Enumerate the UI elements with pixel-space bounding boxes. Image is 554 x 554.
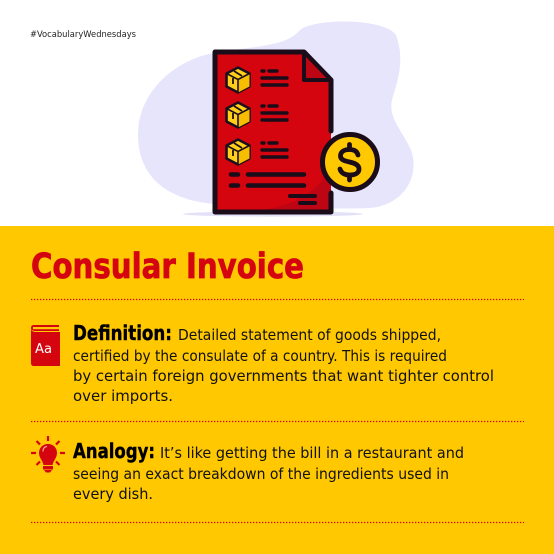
icon: light bulb: [31, 436, 65, 472]
title: Consular Invoice: [31, 247, 304, 287]
definition text: Definition:: [73, 321, 172, 345]
definition text: certified by the consulate of a country. This is required: [73, 347, 447, 365]
panel: yellow content area: [0, 226, 554, 554]
dollar coin: [322, 134, 378, 190]
analogy text: It’s like getting the bill in a restaurant and: [160, 444, 464, 462]
definition text: over imports.: [73, 387, 173, 405]
icon: red book: [31, 325, 60, 366]
background blob: [138, 22, 414, 209]
ground shadow: [183, 211, 363, 217]
icon: red book: Aa: [35, 342, 52, 357]
hashtag: #VocabularyWednesdays: [30, 30, 136, 40]
package icon 2: [226, 102, 250, 128]
definition text: [73, 321, 494, 405]
definition text: Detailed statement of goods shipped,: [178, 326, 441, 344]
definition text: by certain foreign governments that want tighter control: [73, 367, 494, 385]
analogy text: every dish.: [73, 485, 153, 503]
document: [215, 52, 331, 212]
document outline: [215, 52, 331, 212]
page fold: [304, 52, 331, 80]
package icon 1: [226, 68, 250, 92]
analogy text: [73, 439, 464, 503]
analogy text: Analogy:: [73, 439, 155, 463]
document shade: [262, 165, 331, 210]
analogy text: seeing an exact breakdown of the ingredients used in: [73, 465, 449, 483]
package icon 3: [226, 140, 250, 164]
illustration: invoice with dollar coin: [138, 22, 414, 217]
list lines: [231, 71, 315, 203]
